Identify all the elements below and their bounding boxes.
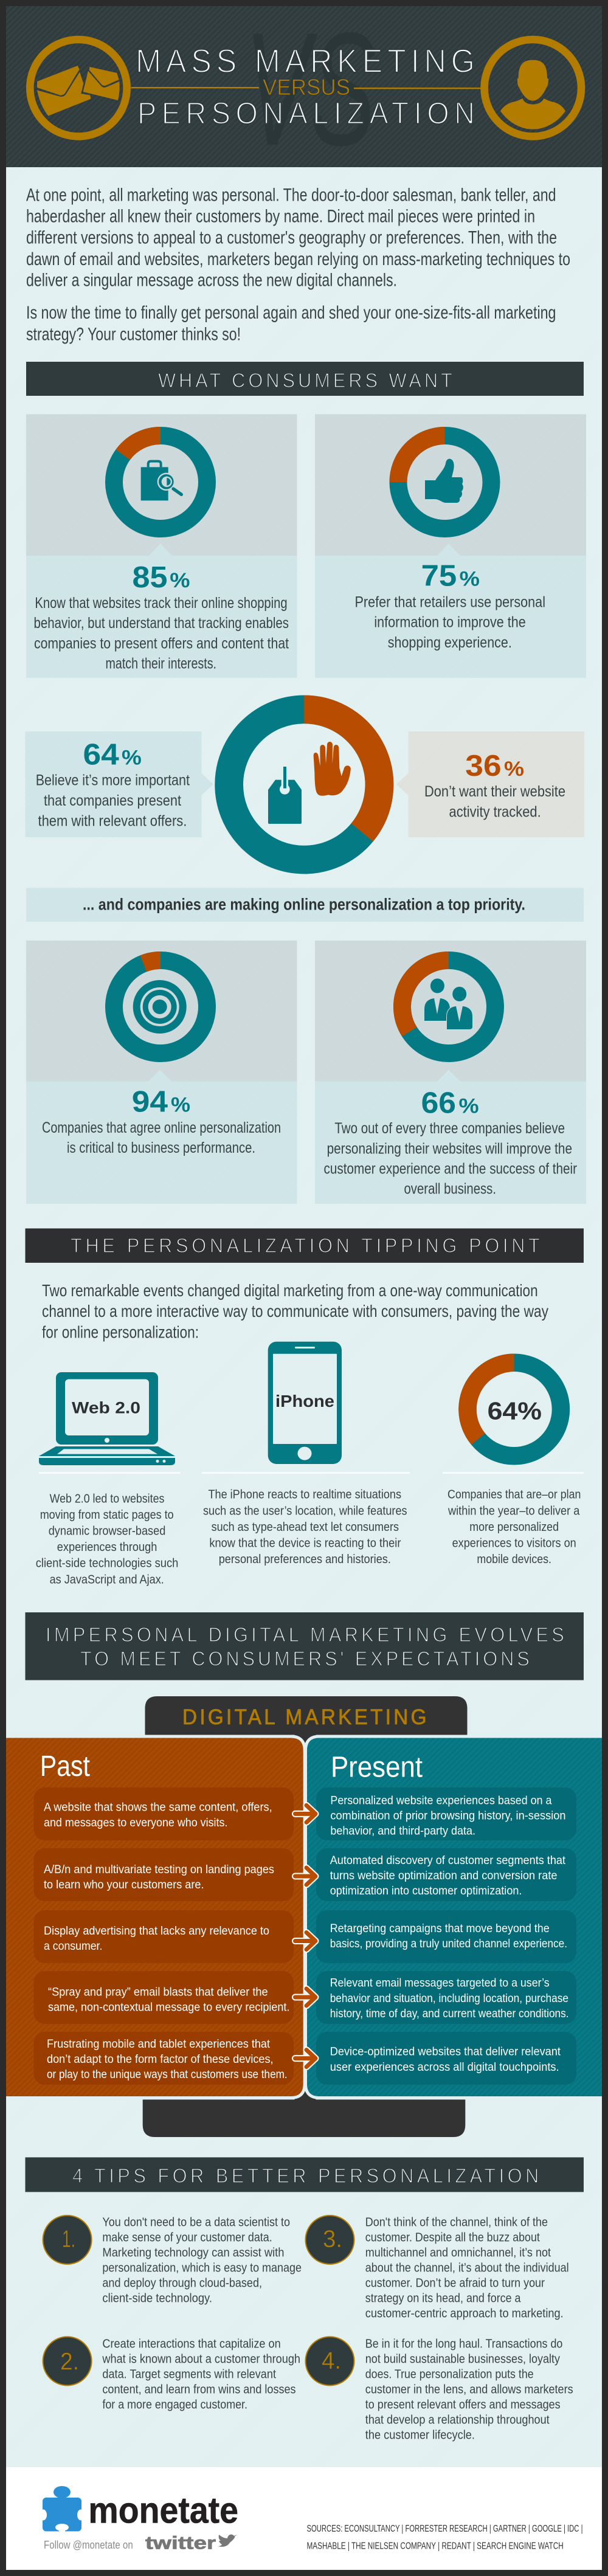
icon: iPhone — [268, 1342, 342, 1464]
donut chart: 64 versus 36 percent — [229, 710, 379, 860]
header banner — [6, 0, 602, 179]
stat: 64%: 64 — [83, 739, 119, 772]
present item 2: turns website optimization and conversion rate — [330, 1869, 557, 1882]
icon: twitter bird — [218, 2535, 237, 2547]
description: 94 percent — [42, 1119, 281, 1156]
faint VS watermark: VS — [244, 0, 376, 179]
description: 36 percent — [424, 783, 565, 820]
tab: digital marketing: DIGITAL MARKETING — [182, 1705, 426, 1729]
tip number 2: 2. — [60, 2348, 79, 2375]
tip text 4: Be in it for the long haul. Transactions do — [365, 2336, 562, 2350]
tip 2 — [43, 2336, 300, 2411]
tip number 3 — [305, 2215, 354, 2264]
present item 5: user experiences across all digital touchpoints. — [330, 2060, 559, 2074]
past item 5: Frustrating mobile and tablet experiences that — [47, 2037, 271, 2051]
tip text 1 — [102, 2215, 302, 2305]
description: 85 percent — [34, 595, 289, 672]
tip text 3: strategy on its head, and force a — [365, 2291, 521, 2305]
tip text 4: that develop a relationship throughout — [365, 2412, 550, 2426]
stat: 66%: 66 — [421, 1087, 456, 1120]
past item 3: Display advertising that lacks any relevance to — [44, 1924, 269, 1938]
panel: 66 percent — [315, 941, 586, 1204]
heading: present: Present — [331, 1752, 423, 1784]
text: 64 percent description: experiences to visitors on — [452, 1536, 576, 1550]
callout: 36 percent — [396, 731, 584, 837]
arrow: past to present 3 — [295, 1932, 316, 1949]
stat: 85% — [133, 561, 190, 594]
text: iPhone description: personal preferences and histories. — [219, 1552, 391, 1566]
past item 4 — [34, 1971, 294, 2024]
donut chart: 94 percent — [114, 961, 207, 1053]
present item 5 — [316, 2032, 576, 2085]
monetate logo: monetate — [88, 2490, 238, 2530]
past item 2: to learn who your customers are. — [44, 1878, 204, 1891]
past item 1: and messages to everyone who visits. — [44, 1816, 227, 1829]
donut chart: 64 percent mobile: 64% — [488, 1397, 542, 1425]
section heading: what consumers want — [26, 362, 584, 396]
tip number 1 — [43, 2215, 92, 2264]
tab: digital marketing — [145, 1696, 467, 1746]
tab: empty bottom bar — [143, 2089, 465, 2137]
panel: 85 percent — [26, 414, 297, 678]
present item 4 — [316, 1971, 576, 2024]
description: 75 percent: Prefer that retailers use personal — [355, 593, 545, 610]
tip text 3 — [365, 2215, 569, 2321]
donut chart: 64 percent mobile — [468, 1362, 561, 1456]
present item 2: optimization into customer optimization. — [330, 1884, 522, 1897]
intro paragraph two — [26, 303, 556, 344]
present item 1: Personalized website experiences based on a — [330, 1794, 552, 1807]
description: 85 percent: Know that websites track their online shopping — [35, 595, 288, 612]
section heading: the personalization tipping point: THE PERSONALIZATION TIPPING POINT — [71, 1234, 540, 1257]
intro paragraph two: strategy? Your customer thinks so! — [26, 325, 241, 344]
past item 1 — [34, 1787, 294, 1840]
icon: puzzle piece — [40, 2486, 85, 2532]
icon: target — [133, 980, 187, 1034]
stat: 94% — [132, 1086, 190, 1119]
tip text 1: Marketing technology can assist with — [102, 2246, 285, 2259]
description: 64 percent: Believe it’s more important — [36, 772, 190, 789]
panel: 94 percent — [26, 941, 297, 1204]
stat: 36% — [465, 750, 524, 782]
tip 1 — [43, 2215, 302, 2305]
stat: 66% — [421, 1087, 479, 1120]
past item 4: “Spray and pray” email blasts that deliver the — [48, 1986, 268, 1999]
description: 64 percent: them with relevant offers. — [38, 812, 187, 829]
tipping point intro text: for online personalization: — [42, 1323, 199, 1342]
tip text 1: client-side technology. — [102, 2291, 212, 2305]
description: 75 percent — [355, 593, 545, 651]
text: iPhone description: such as the user’s location, while features — [203, 1504, 407, 1518]
tip text 1: make sense of your customer data. — [102, 2230, 272, 2245]
follow on twitter — [44, 2533, 237, 2554]
tip text 2: what is known about a customer through — [102, 2352, 300, 2366]
description: 66 percent — [323, 1120, 577, 1198]
tip text 3: customer. Don’t be afraid to turn your — [365, 2276, 545, 2290]
tip text 2: for a more engaged customer. — [102, 2397, 247, 2411]
tip text 3: Don't think of the channel, think of the — [365, 2215, 548, 2229]
stat: 94%: % — [171, 1094, 190, 1117]
text: 64 percent description: Companies that are–or plan — [447, 1487, 581, 1502]
tip number 2 — [43, 2337, 92, 2386]
icon: raised hand — [314, 742, 351, 796]
tip 3 — [305, 2215, 569, 2321]
section heading: impersonal digital marketing evolves: TO MEET CONSUMERS' EXPECTATIONS — [80, 1647, 530, 1670]
present item 3 — [316, 1910, 576, 1963]
description: 66 percent: Two out of every three companies believe — [334, 1120, 565, 1137]
stat: 64%: % — [122, 747, 142, 770]
section heading: what consumers want: WHAT CONSUMERS WANT — [158, 369, 452, 392]
sources — [306, 2524, 582, 2551]
icon: two business people — [424, 979, 472, 1029]
description: 94 percent: is critical to business performance. — [67, 1139, 255, 1156]
past item 2: A/B/n and multivariate testing on landing pages — [44, 1863, 274, 1876]
text: Web 2.0 description: dynamic browser-based — [49, 1524, 165, 1538]
tip number 4 — [305, 2337, 354, 2386]
text: Web 2.0 description: Web 2.0 led to websites — [50, 1491, 164, 1505]
stat: 85%: 85 — [133, 561, 168, 594]
stat: 64% — [83, 739, 142, 772]
description: 85 percent: behavior, but understand that tracking enables — [34, 615, 289, 632]
description: 75 percent: information to improve the — [374, 613, 526, 630]
monetate logo — [40, 2486, 238, 2532]
versus divider: VERSUS — [263, 75, 350, 100]
description: 36 percent: Don’t want their website — [424, 783, 565, 800]
intro paragraph one — [26, 185, 570, 291]
tip text 3: customer. Despite all the buzz about — [365, 2230, 540, 2245]
description: 64 percent: that companies present — [44, 792, 181, 809]
section heading: 4 tips: 4 TIPS FOR BETTER PERSONALIZATION — [72, 2164, 539, 2187]
intro text — [26, 185, 570, 344]
past item 5: or play to the unique ways that customers use them. — [47, 2068, 288, 2081]
description: 94 percent: Companies that agree online personalization — [42, 1119, 281, 1136]
section heading: impersonal digital marketing evolves — [26, 1612, 584, 1680]
present item 5: Device-optimized websites that deliver relevant — [330, 2045, 561, 2059]
heading: past: Past — [40, 1750, 90, 1783]
description: 36 percent: activity tracked. — [449, 803, 541, 820]
icon: thumbs up — [425, 459, 463, 503]
icon: shopping bag with magnifier — [141, 461, 181, 500]
text: 64 percent description: mobile devices. — [477, 1552, 551, 1566]
tip text 2: Create interactions that capitalize on — [102, 2336, 281, 2350]
present item 4: behavior and situation, including location, purchase — [330, 1992, 568, 2005]
tip number 4: 4. — [322, 2347, 341, 2374]
description: 75 percent: shopping experience. — [388, 634, 512, 651]
tip text 4: the customer lifecycle. — [365, 2428, 475, 2442]
text: Web 2.0 description — [36, 1491, 178, 1586]
intro paragraph one: deliver a singular message across the new digital channels. — [26, 271, 397, 291]
arrow: past to present 2 — [295, 1868, 316, 1885]
tip text 4: customer in the lens, and allows marketers — [365, 2382, 573, 2396]
icon: envelopes in gold ring — [30, 40, 127, 136]
tip text 4: does. True personalization puts the — [365, 2367, 534, 2381]
icon: price tag — [268, 767, 302, 824]
present item 3: basics, providing a truly united channel experience. — [330, 1937, 567, 1950]
panel: 75 percent — [315, 414, 586, 678]
text: 64 percent description: within the year–to deliver a — [447, 1504, 580, 1518]
text: Web 2.0 description: experiences through — [57, 1540, 157, 1554]
present item 1: behavior, and third-party data. — [330, 1825, 475, 1838]
text: iPhone description: know that the device is reacting to their — [209, 1536, 401, 1550]
present item 1 — [316, 1787, 576, 1840]
text: Web 2.0 description: moving from static pages to — [40, 1508, 174, 1522]
present item 4: history, time of day, and current weather conditions. — [330, 2007, 569, 2020]
present item 2: Automated discovery of customer segments that — [330, 1854, 566, 1867]
arrow: past to present 1 — [295, 1805, 316, 1822]
donut chart: 85 percent — [114, 435, 207, 529]
tip text 1: personalization, which is easy to manage — [102, 2260, 302, 2275]
description: 64 percent — [36, 772, 190, 829]
text: Web 2.0 description: client-side technologies such — [36, 1556, 178, 1570]
past item 4: same, non-contextual message to every recipient. — [48, 2000, 289, 2014]
past item 2 — [34, 1848, 294, 1901]
donut chart: 75 percent — [398, 435, 491, 529]
tip text 4 — [365, 2336, 573, 2442]
arrow: past to present 4 — [295, 1989, 316, 2006]
stat: 75%: 75 — [421, 560, 457, 593]
tip text 3: multichannel and omnichannel, it’s not — [365, 2246, 551, 2259]
title: mass marketing: MASS MARKETING — [136, 43, 475, 80]
tip 4 — [305, 2336, 573, 2442]
section heading: 4 tips — [26, 2157, 584, 2192]
past item 5 — [34, 2032, 294, 2085]
tip text 2: content, and learn from wins and losses — [102, 2382, 296, 2396]
icon: person in gold ring — [485, 40, 581, 136]
tip number 1: 1. — [62, 2226, 75, 2253]
stat: 36%: % — [504, 758, 524, 781]
follow on twitter: twitter — [145, 2533, 216, 2554]
stat: 94%: 94 — [132, 1086, 168, 1119]
past item 3: a consumer. — [44, 1939, 102, 1953]
icon: Web 2.0 laptop: Web 2.0 — [72, 1398, 140, 1417]
text: iPhone description: such as type-ahead text let consumers — [212, 1520, 399, 1534]
tipping point intro text — [42, 1281, 548, 1342]
description: 66 percent: overall business. — [404, 1181, 496, 1198]
text: Web 2.0 description: as JavaScript and Ajax. — [50, 1572, 164, 1586]
panel: past — [6, 1738, 303, 2096]
tip text 4: not build sustainable businesses, loyalty — [365, 2352, 561, 2366]
callout: 64 percent — [26, 731, 213, 837]
present item 4: Relevant email messages targeted to a user’s — [330, 1976, 550, 1989]
stat: 75% — [421, 560, 480, 593]
tip text 1: and deploy through cloud-based, — [102, 2276, 262, 2290]
tip text 4: to present relevant offers and messages — [365, 2397, 561, 2411]
icon: iPhone: iPhone — [275, 1392, 334, 1411]
text: 64 percent description — [447, 1487, 581, 1566]
text: iPhone description — [203, 1487, 407, 1566]
tip text 3: about the channel, it’s about the individual — [365, 2260, 569, 2275]
text: iPhone description: The iPhone reacts to realtime situations — [208, 1487, 401, 1502]
description: 85 percent: match their interests. — [106, 655, 216, 672]
past item 3 — [34, 1910, 294, 1963]
stat: 66%: % — [458, 1095, 479, 1118]
donut chart: 66 percent — [402, 961, 495, 1053]
text: 64 percent description: more personalized — [469, 1520, 559, 1534]
past item 5: don’t adapt to the form factor of these devices, — [47, 2053, 274, 2066]
present item 2 — [316, 1848, 576, 1901]
past item 1: A website that shows the same content, offers, — [44, 1800, 272, 1814]
present item 3: Retargeting campaigns that move beyond the — [330, 1922, 550, 1935]
section heading: the personalization tipping point — [26, 1228, 584, 1263]
tip text 2 — [102, 2336, 300, 2411]
present item 1: combination of prior browsing history, in-session — [330, 1809, 565, 1823]
banner: companies priority — [26, 888, 584, 922]
tip text 1: You don't need to be a data scientist to — [102, 2215, 290, 2229]
tip text 2: data. Target segments with relevant — [102, 2367, 276, 2381]
section heading: impersonal digital marketing evolves: IMPERSONAL DIGITAL MARKETING EVOLVES — [46, 1623, 564, 1646]
banner: companies priority: ... and companies are making online personalization a top priority. — [83, 895, 525, 913]
tip number 3: 3. — [323, 2226, 342, 2253]
title: personalization: PERSONALIZATION — [137, 97, 475, 131]
icon: Web 2.0 laptop — [39, 1372, 175, 1465]
arrow: past to present 5 — [295, 2050, 316, 2067]
tip text 3: customer-centric approach to marketing. — [365, 2307, 564, 2321]
follow on twitter: Follow @monetate on — [44, 2538, 133, 2551]
footer — [6, 2467, 602, 2570]
description: 85 percent: companies to present offers and content that — [34, 635, 289, 652]
stat: 85%: % — [170, 569, 190, 592]
panel: present — [307, 1738, 602, 2096]
stat: 36%: 36 — [465, 750, 502, 782]
stat: 75%: % — [460, 568, 480, 591]
